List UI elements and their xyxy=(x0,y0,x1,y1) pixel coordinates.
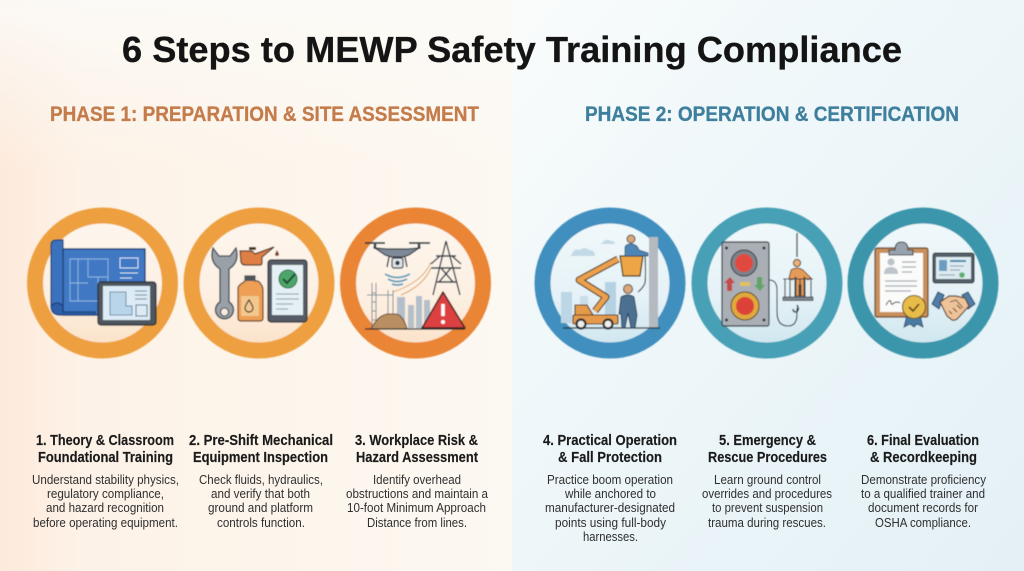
title: 6 Steps to MEWP Safety Training Compliance xyxy=(122,29,902,70)
step 6 text: & Recordkeeping xyxy=(870,449,977,466)
icon badge 2: inspection tools xyxy=(192,216,326,350)
step 2 text xyxy=(189,432,333,530)
step 5 text: 5. Emergency & xyxy=(719,432,816,449)
step 4 text: while anchored to xyxy=(564,486,656,501)
step 1 text: 1. Theory & Classroom xyxy=(36,432,174,449)
step 5 text xyxy=(702,432,832,530)
step 1 text: Understand stability physics, xyxy=(32,472,179,487)
heading: phase 1: PHASE 1: PREPARATION & SITE ASSESSMENT xyxy=(50,103,479,126)
step 4 text: harnesses. xyxy=(583,529,638,544)
step 3 text xyxy=(346,432,489,530)
icon badge 4: boom lift and fall protection xyxy=(542,216,678,350)
step 1 text: Foundational Training xyxy=(38,449,173,466)
step 6 text: to a qualified trainer and xyxy=(861,486,985,501)
step 2 text: Check fluids, hydraulics, xyxy=(199,472,323,487)
step 1 text: before operating equipment. xyxy=(33,515,178,530)
step 3 text: 3. Workplace Risk & xyxy=(355,432,478,449)
step 4 text: points using full-body xyxy=(555,515,666,530)
step 2 text: Equipment Inspection xyxy=(193,449,328,466)
step 4 text xyxy=(543,432,677,544)
step 5 text: Rescue Procedures xyxy=(708,449,827,466)
step 3 text: obstructions and maintain a xyxy=(346,486,489,501)
step 2 text: ground and platform xyxy=(208,500,313,515)
step 6 text: OSHA compliance. xyxy=(875,515,971,530)
step 3 text: 10-foot Minimum Approach xyxy=(347,500,486,515)
step 4 text: 4. Practical Operation xyxy=(543,432,677,449)
step 2 text: controls function. xyxy=(217,515,305,530)
icon badge 5: control panel and suspended worker xyxy=(700,216,834,350)
step 4 text: Practice boom operation xyxy=(547,472,673,487)
step 4 text: & Fall Protection xyxy=(558,449,662,466)
step 6 text xyxy=(861,432,986,530)
step 4 text: manufacturer-designated xyxy=(545,500,675,515)
step 2 text: and verify that both xyxy=(211,486,310,501)
step 1 text: and hazard recognition xyxy=(46,500,164,515)
step 5 text: trauma during rescues. xyxy=(708,515,826,530)
step 3 text: Distance from lines. xyxy=(367,515,467,530)
step 1 text: regulatory compliance, xyxy=(47,486,164,501)
icon badge 3: drone, power line and hazard xyxy=(348,216,483,350)
icon badge 1: blueprint and tablet xyxy=(35,216,170,350)
step 6 text: document records for xyxy=(868,500,979,515)
heading: phase 2: PHASE 2: OPERATION & CERTIFICATION xyxy=(585,103,959,126)
step 1 text xyxy=(32,432,179,530)
step 5 text: overrides and procedures xyxy=(702,486,832,501)
icon badge 6: clipboard, credential and handshake xyxy=(856,216,990,350)
step 3 text: Hazard Assessment xyxy=(356,449,478,466)
step 5 text: Learn ground control xyxy=(714,472,821,487)
step 2 text: 2. Pre-Shift Mechanical xyxy=(189,432,333,449)
step 6 text: Demonstrate proficiency xyxy=(861,472,986,487)
step 3 text: Identify overhead xyxy=(373,472,461,487)
step 5 text: to prevent suspension xyxy=(712,500,823,515)
step 6 text: 6. Final Evaluation xyxy=(867,432,979,449)
